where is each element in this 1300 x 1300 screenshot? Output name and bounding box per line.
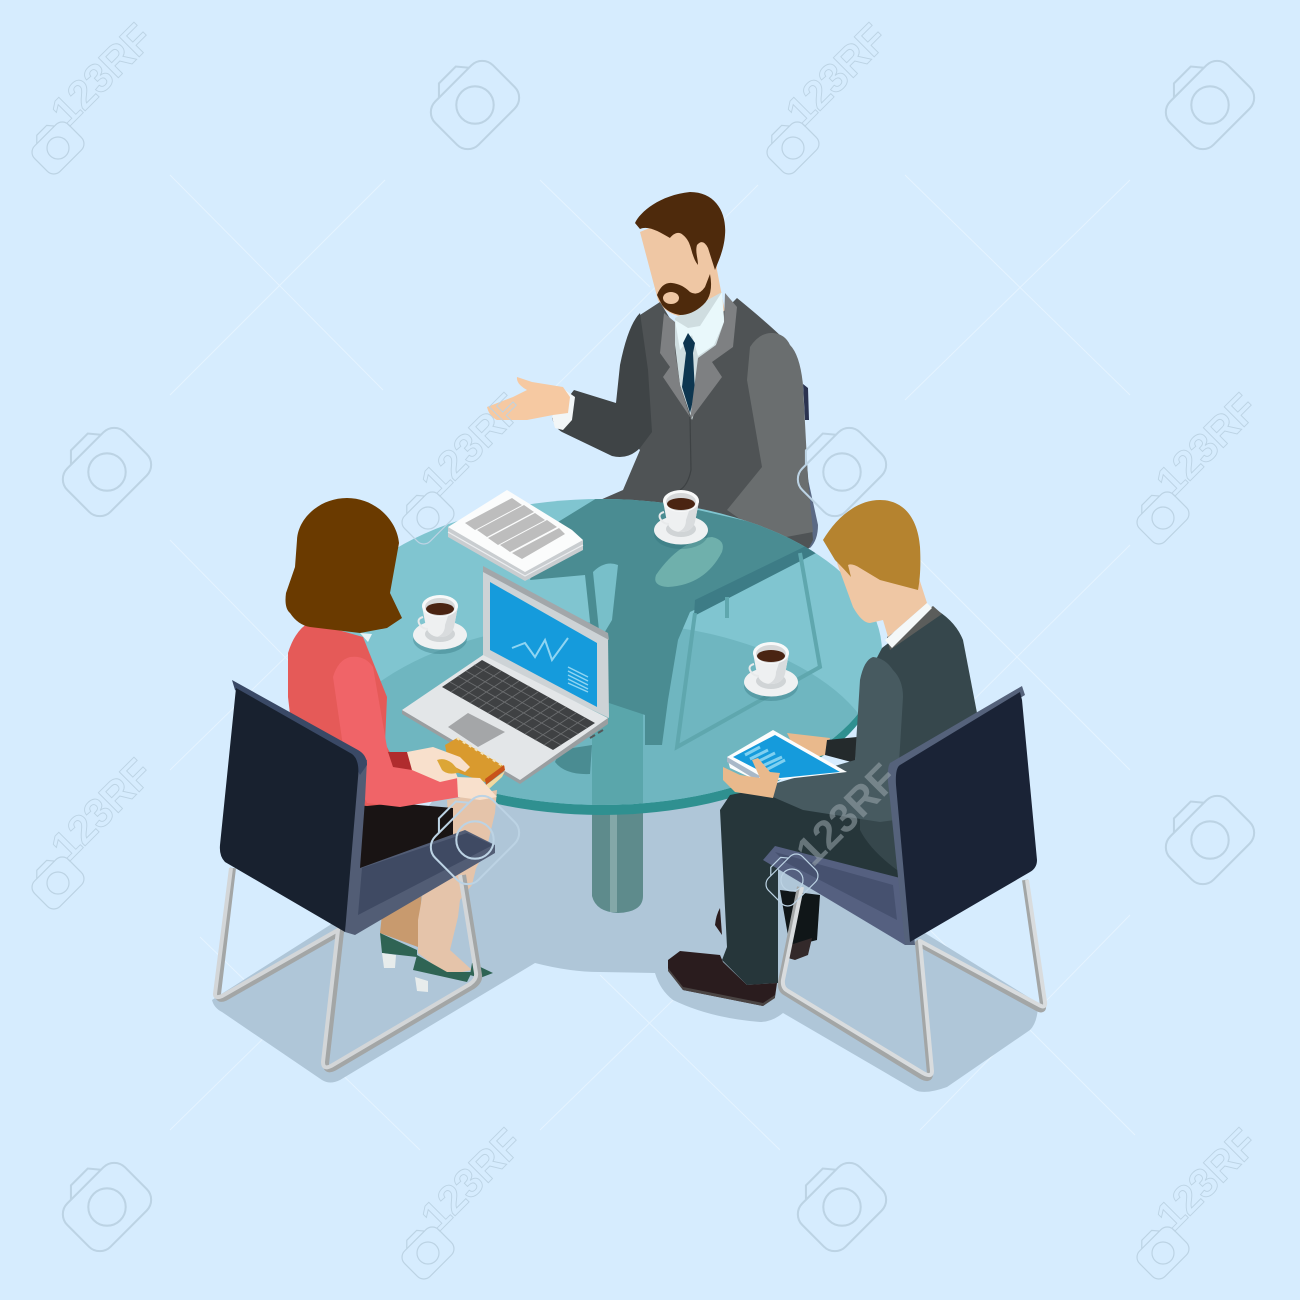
see-through thigh highlight bbox=[593, 564, 618, 640]
see-through presenter body bbox=[530, 490, 830, 745]
screen chart bbox=[512, 638, 568, 660]
laptop screen bbox=[490, 582, 597, 707]
sleeve bbox=[773, 657, 903, 822]
chair side frame bbox=[888, 686, 1025, 945]
laptop shadow bbox=[555, 745, 592, 774]
laptop base edge bbox=[402, 710, 608, 784]
coffee cup top bbox=[654, 490, 708, 549]
cuff bbox=[388, 752, 412, 770]
gold spot between fingers bbox=[437, 759, 460, 774]
row 2 marks: 123RF bbox=[1147, 385, 1266, 504]
chair legs bbox=[781, 880, 1045, 1078]
front leg bbox=[418, 860, 478, 975]
chair legs bbox=[215, 868, 479, 1069]
see-through knee highlight bbox=[655, 537, 723, 587]
row 2 marks: 123RF bbox=[412, 385, 531, 504]
back leg bbox=[380, 890, 422, 947]
lower hand bbox=[457, 777, 497, 800]
laptop lid bbox=[483, 568, 609, 718]
laptop bbox=[402, 566, 609, 784]
chair back panel bbox=[220, 688, 358, 932]
tablet screen bbox=[733, 735, 840, 778]
man with tablet bbox=[668, 500, 1045, 1078]
jacket body bbox=[860, 608, 977, 880]
jacket seam bbox=[680, 417, 691, 490]
see-through chair frame bbox=[677, 553, 820, 747]
cuff bbox=[552, 390, 575, 430]
glass table bbox=[340, 499, 882, 815]
papers stack bbox=[448, 490, 583, 581]
far cuff bbox=[825, 737, 857, 763]
collar bbox=[360, 633, 372, 642]
dark jacket collar bbox=[887, 606, 942, 650]
usb ports bbox=[590, 730, 603, 738]
woman seated bbox=[215, 498, 505, 1069]
near hand bbox=[723, 758, 780, 798]
see-through seat band bbox=[694, 545, 818, 616]
blouse bbox=[288, 622, 460, 806]
back shoe bbox=[788, 938, 812, 960]
notebook bbox=[445, 738, 505, 782]
row 2 marks bbox=[49, 385, 1266, 548]
torso jacket bbox=[600, 298, 813, 565]
row 1 marks: 123RF bbox=[777, 15, 896, 134]
see-through floor shadow bbox=[381, 622, 858, 805]
floor shadow bbox=[212, 760, 1038, 1092]
tablet edge bbox=[727, 757, 760, 781]
shoe sole bbox=[668, 968, 775, 1006]
row 3 marks: 123RF bbox=[787, 755, 906, 874]
back shoe bbox=[380, 933, 417, 957]
man presenting bbox=[487, 192, 813, 565]
row 3 marks bbox=[24, 750, 1260, 913]
table top bbox=[322, 499, 882, 805]
tablet bars bbox=[745, 747, 785, 770]
trousers bbox=[720, 785, 898, 985]
knee bbox=[447, 790, 497, 880]
back shoe left bbox=[715, 908, 722, 935]
neck and face bbox=[640, 215, 725, 327]
front shoe bbox=[413, 955, 472, 982]
dark gesturing arm bbox=[552, 313, 652, 457]
front shoe bbox=[668, 951, 777, 1006]
chair seat frame bbox=[345, 755, 495, 935]
screen text lines bbox=[568, 667, 588, 692]
row 1 marks: 123RF bbox=[42, 15, 161, 134]
tablet bbox=[727, 730, 847, 782]
coffee cup left bbox=[413, 595, 467, 654]
tie bbox=[682, 333, 695, 413]
chair back panel bbox=[896, 692, 1037, 942]
lapels bbox=[660, 313, 690, 417]
ear bbox=[699, 241, 715, 269]
neck and face bbox=[837, 550, 927, 637]
laptop base bbox=[402, 655, 608, 780]
row 1 marks bbox=[24, 15, 1260, 178]
touchpad bbox=[448, 713, 505, 747]
faint diagonal lines bbox=[170, 175, 1135, 1150]
row 4 marks: 123RF bbox=[412, 1120, 531, 1239]
table rim bbox=[322, 509, 882, 815]
shirt collar bbox=[885, 603, 932, 648]
far hand bbox=[787, 733, 830, 760]
back leg bbox=[780, 890, 820, 947]
hair bbox=[286, 498, 402, 633]
chair seat frame bbox=[763, 846, 908, 945]
hair bbox=[823, 500, 920, 590]
hair bbox=[635, 192, 725, 270]
beard bbox=[657, 274, 711, 315]
chair back edge bbox=[232, 680, 367, 775]
upper hand bbox=[407, 747, 470, 782]
skirt bbox=[350, 800, 453, 872]
coffee cup right bbox=[744, 642, 798, 701]
hand bbox=[487, 377, 570, 420]
row 3 marks: 123RF bbox=[42, 750, 161, 869]
row 4 marks: 123RF bbox=[1147, 1120, 1266, 1239]
chair behind presenter bbox=[775, 384, 818, 548]
light sleeve bbox=[727, 333, 813, 540]
keyboard bbox=[442, 660, 595, 750]
chair seat bbox=[358, 833, 493, 915]
see-through pillar bbox=[592, 703, 643, 805]
shirt bbox=[675, 292, 725, 420]
chair seat bbox=[775, 852, 897, 920]
table pillar bbox=[592, 800, 643, 913]
sleeve bbox=[333, 657, 460, 807]
notebook spiral bbox=[457, 738, 505, 767]
row 4 marks bbox=[49, 1120, 1266, 1283]
